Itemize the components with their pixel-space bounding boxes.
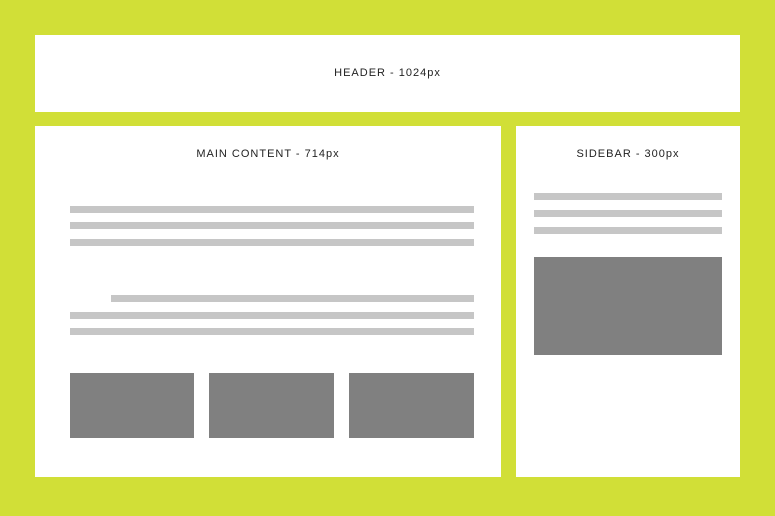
- panel: header: [35, 35, 740, 112]
- sidebar text lines: [534, 193, 722, 234]
- panel: main content: [35, 126, 501, 477]
- sidebar label: SIDEBAR - 300px: [576, 148, 680, 160]
- sidebar image box: [534, 257, 722, 355]
- text lines group 2: [70, 295, 474, 335]
- panel: sidebar: [516, 126, 740, 477]
- image boxes row: [70, 373, 474, 438]
- header label: HEADER - 1024px: [334, 67, 441, 79]
- text lines group 1: [70, 206, 474, 246]
- main content label: MAIN CONTENT - 714px: [196, 148, 340, 160]
